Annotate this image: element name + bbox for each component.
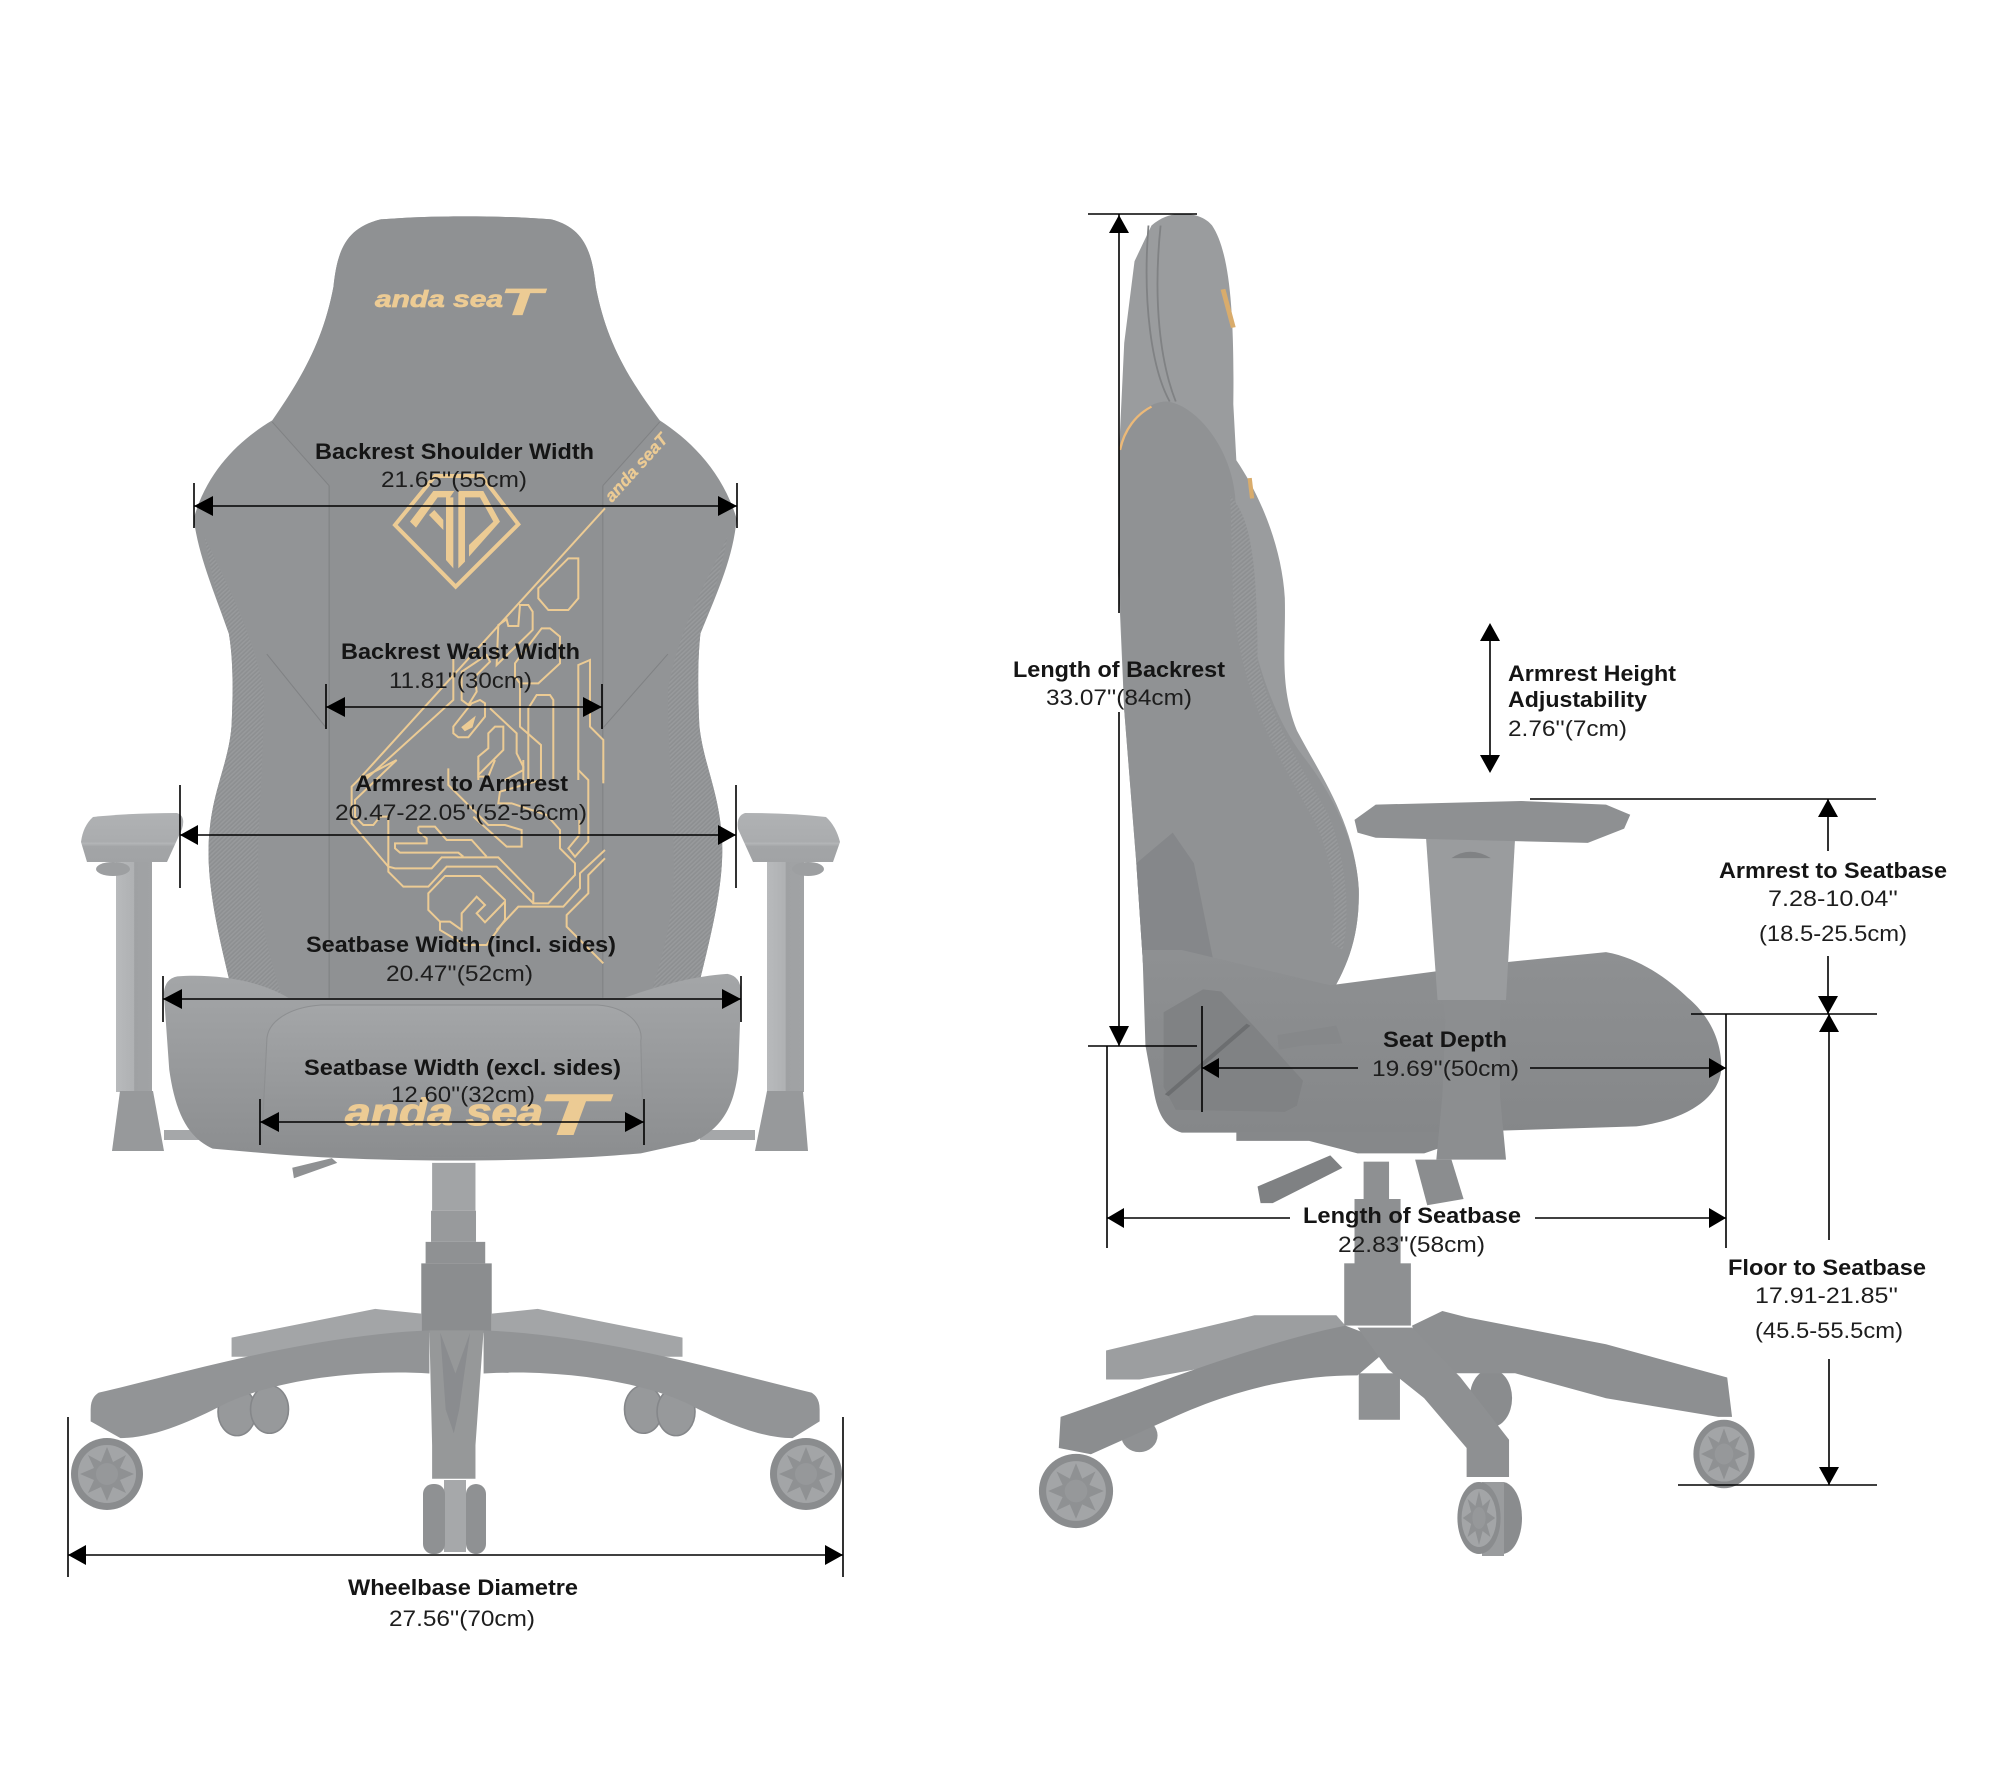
armrest post lower bbox=[1436, 950, 1506, 1160]
label: floor to seatbase: (45.5-55.5cm) bbox=[1755, 1318, 1903, 1343]
mechanism bbox=[1236, 1128, 1448, 1153]
label: backrest waist width: 11.81''(30cm) bbox=[389, 668, 532, 693]
headrest logo: T bbox=[500, 282, 547, 324]
knob bbox=[1415, 1160, 1464, 1205]
backrest circuit pattern upper bbox=[358, 508, 605, 780]
side view chair bbox=[1039, 214, 1755, 1556]
label: seatbase width incl sides bbox=[306, 932, 616, 986]
seat logo bbox=[345, 1083, 614, 1148]
dimension: armrest to armrest bbox=[180, 771, 736, 888]
side gas lift bbox=[1344, 1162, 1411, 1326]
shoulder logo: anda seaT bbox=[601, 429, 673, 506]
lever bbox=[1258, 1155, 1342, 1203]
AD emblem bbox=[395, 476, 518, 587]
dimension: armrest height adjustability bbox=[1480, 623, 1677, 773]
backrest circuit pattern lower bbox=[352, 760, 605, 963]
label: wheelbase diametre: Wheelbase Diametre bbox=[348, 1575, 578, 1600]
label: armrest to seatbase bbox=[1719, 858, 1947, 946]
label: armrest to armrest: Armrest to Armrest bbox=[355, 771, 569, 796]
label: armrest to armrest: 20.47-22.05''(52-56cm) bbox=[335, 800, 587, 825]
stub bbox=[1359, 1373, 1400, 1420]
front leg bbox=[1358, 1328, 1509, 1477]
label: wheelbase diametre: 27.56''(70cm) bbox=[389, 1606, 535, 1631]
front casters bbox=[71, 1438, 842, 1554]
label: armrest to seatbase: Armrest to Seatbase bbox=[1719, 858, 1947, 883]
centre double caster bbox=[1457, 1482, 1522, 1556]
label: length of seatbase bbox=[1303, 1203, 1521, 1257]
right leg bbox=[484, 1330, 820, 1438]
label: backrest shoulder width: Backrest Shoulder Width bbox=[315, 439, 594, 464]
rear casters bbox=[1121, 1369, 1512, 1452]
front right armrest bbox=[700, 813, 840, 1151]
label: seat depth: 19.69''(50cm) bbox=[1372, 1056, 1519, 1081]
label: length of backrest bbox=[1013, 657, 1226, 710]
label: seatbase width excl sides: 12.60''(32cm) bbox=[391, 1082, 535, 1107]
dimension: floor to seatbase bbox=[1678, 1014, 1926, 1485]
seat lever bbox=[292, 1158, 337, 1178]
label: backrest shoulder width: 21.65''(55cm) bbox=[381, 467, 527, 492]
seat handle bbox=[1278, 1026, 1342, 1050]
left leg bbox=[1059, 1326, 1394, 1454]
label: seatbase width excl sides: Seatbase Width (excl. sides) bbox=[304, 1055, 621, 1080]
side armrest bbox=[1355, 801, 1630, 1000]
seat logo: anda sea bbox=[345, 1092, 543, 1134]
dimension: seatbase width incl sides bbox=[163, 932, 741, 1022]
left leg bbox=[91, 1330, 429, 1438]
label: wheelbase diametre bbox=[348, 1575, 578, 1631]
label: armrest height adjustability: 2.76''(7cm) bbox=[1508, 716, 1627, 741]
seat logo: T bbox=[537, 1083, 614, 1148]
rear wheels bbox=[218, 1385, 695, 1436]
dimension: backrest shoulder width bbox=[194, 439, 737, 528]
dimension: backrest waist width bbox=[326, 639, 602, 729]
back-left leg bbox=[1106, 1315, 1345, 1380]
right leg bbox=[1412, 1311, 1732, 1417]
side seat cushion bbox=[1142, 950, 1721, 1133]
label: seatbase width incl sides: Seatbase Width (incl. sides) bbox=[306, 932, 616, 957]
centre leg bbox=[429, 1330, 484, 1479]
dimension: seatbase width excl sides bbox=[260, 1055, 644, 1145]
dimension: length of seatbase bbox=[1107, 1046, 1726, 1257]
front view chair bbox=[71, 216, 842, 1554]
label: length of backrest: Length of Backrest bbox=[1013, 657, 1226, 682]
front gas lift bbox=[421, 1163, 492, 1333]
label: length of seatbase: Length of Seatbase bbox=[1303, 1203, 1521, 1228]
label: seat depth bbox=[1372, 1027, 1519, 1081]
label: armrest to seatbase: 7.28-10.04'' bbox=[1768, 886, 1898, 911]
side backrest bbox=[1118, 214, 1359, 1000]
label: floor to seatbase: 17.91-21.85'' bbox=[1755, 1283, 1898, 1308]
front backrest bbox=[194, 216, 737, 1000]
side base and seat bbox=[1059, 950, 1732, 1477]
label: backrest waist width: Backrest Waist Width bbox=[341, 639, 580, 664]
label: armrest to armrest bbox=[335, 771, 587, 825]
label: backrest waist width bbox=[341, 639, 580, 693]
label: seatbase width incl sides: 20.47''(52cm) bbox=[386, 961, 533, 986]
label: armrest height adjustability: Adjustability bbox=[1508, 687, 1648, 712]
dimension: armrest to seatbase bbox=[1530, 799, 1947, 1014]
dimension: seat depth bbox=[1202, 1006, 1726, 1248]
headrest logo bbox=[375, 282, 547, 324]
label: seat depth: Seat Depth bbox=[1383, 1027, 1507, 1052]
label: armrest to seatbase: (18.5-25.5cm) bbox=[1759, 921, 1907, 946]
headrest logo: anda sea bbox=[375, 286, 503, 312]
side casters bbox=[1039, 1420, 1755, 1556]
label: armrest height adjustability bbox=[1508, 661, 1677, 741]
dimension: wheelbase diametre bbox=[68, 1417, 843, 1631]
side plate bbox=[1164, 989, 1303, 1112]
back legs bbox=[232, 1309, 421, 1357]
dimension: length of backrest bbox=[1013, 214, 1226, 1046]
front base bbox=[91, 1158, 820, 1479]
front seat bbox=[164, 974, 741, 1161]
label: length of seatbase: 22.83''(58cm) bbox=[1338, 1232, 1485, 1257]
front middle caster bbox=[423, 1480, 486, 1554]
label: backrest shoulder width bbox=[315, 439, 594, 492]
front left armrest bbox=[81, 813, 210, 1151]
label: floor to seatbase: Floor to Seatbase bbox=[1728, 1255, 1926, 1280]
label: seatbase width excl sides bbox=[304, 1055, 621, 1107]
label: armrest height adjustability: Armrest Height bbox=[1508, 661, 1677, 686]
label: floor to seatbase bbox=[1728, 1255, 1926, 1343]
label: length of backrest: 33.07''(84cm) bbox=[1046, 685, 1192, 710]
